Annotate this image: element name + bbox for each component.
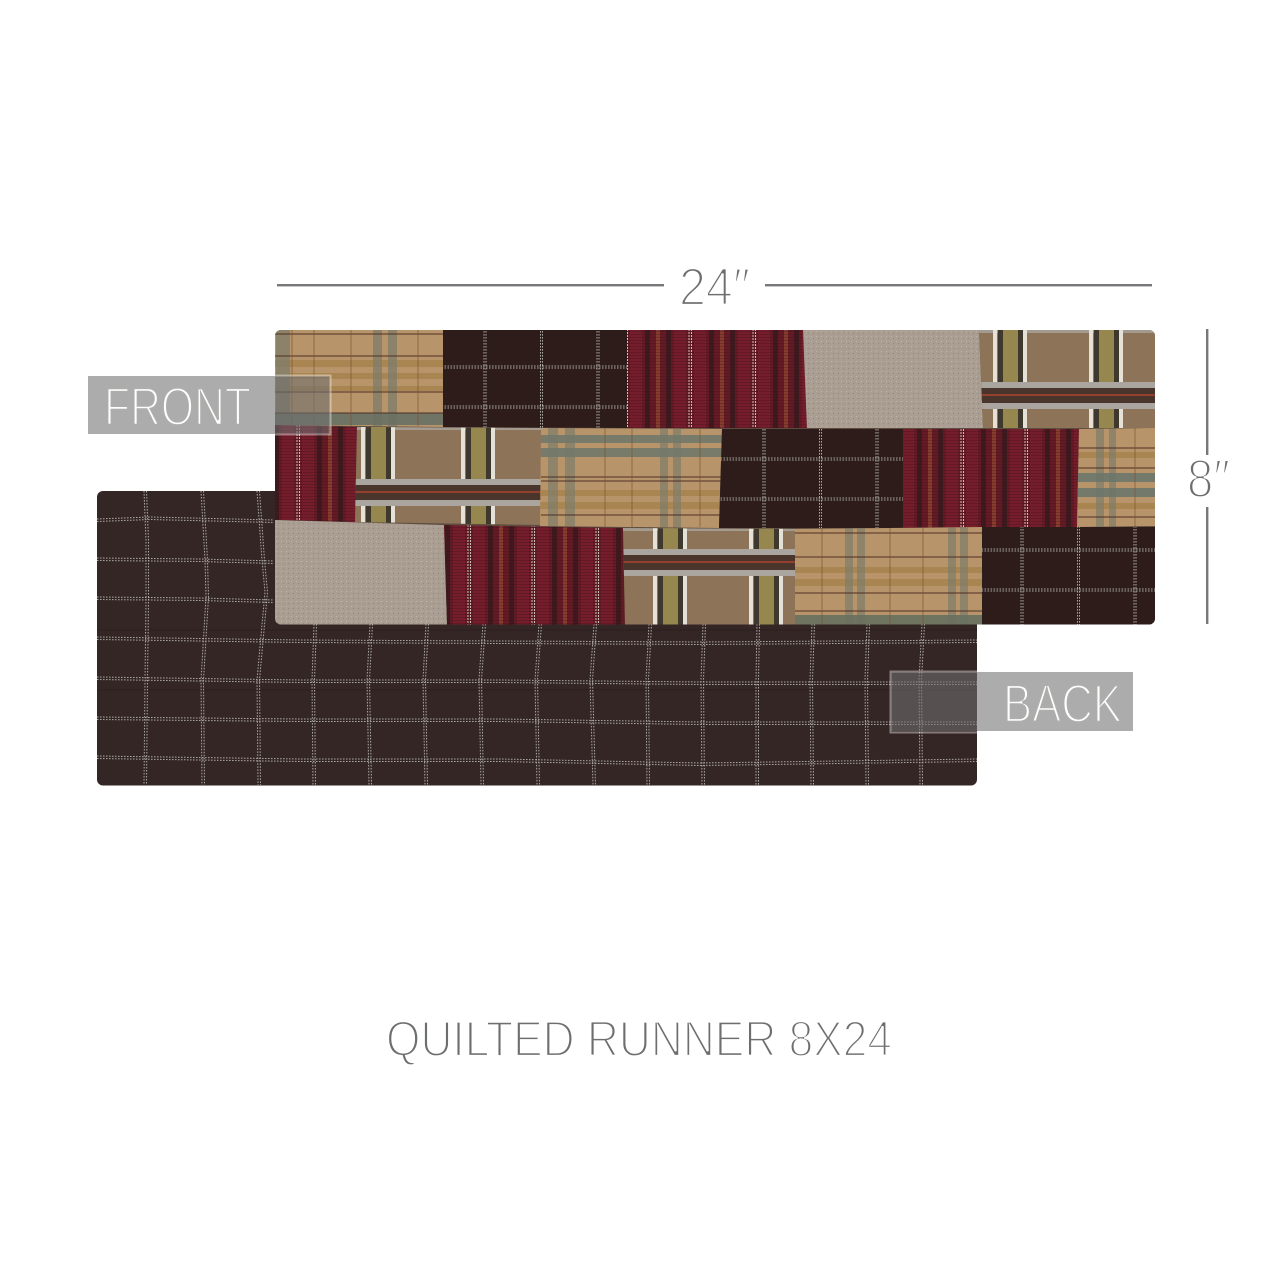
label: FRONT: FRONT bbox=[104, 377, 251, 437]
patch: tan plaid, row 2 bbox=[540, 428, 723, 528]
patch: tan plaid, row 1 bbox=[274, 329, 444, 428]
patch: red stripe, row 3 bbox=[444, 525, 625, 625]
label: BACK: BACK bbox=[1003, 674, 1122, 734]
patch: red stripe, row 1 bbox=[627, 329, 807, 428]
patch: tan plaid, row 3 bbox=[795, 527, 983, 625]
patch: grey felt, row 3 bbox=[274, 520, 447, 625]
patch: brown plaid, row 3 bbox=[623, 528, 795, 624]
label: BACK bbox=[890, 672, 1133, 734]
title: QUILTED RUNNER 8X24 bbox=[386, 1011, 892, 1067]
back of runner: dark windowpane fabric bbox=[97, 491, 977, 786]
patch: brown plaid, row 1 bbox=[979, 330, 1155, 428]
front of runner: patchwork bbox=[275, 330, 1155, 624]
patch: grey felt, row 1 bbox=[803, 329, 983, 428]
width dimension: 24 inches: 24″ bbox=[679, 258, 750, 317]
patch: tan plaid, row 2 right bbox=[1076, 428, 1156, 528]
patch: red stripe, row 2 left bbox=[274, 425, 357, 522]
patch: dark windowpane, row 2 bbox=[719, 429, 903, 528]
patch: brown plaid, row 2 bbox=[355, 427, 541, 525]
patch: dark windowpane, row 3 bbox=[982, 527, 1155, 625]
patch: dark windowpane, row 1 bbox=[443, 329, 629, 428]
infographic canvas bbox=[88, 269, 1228, 1064]
patch: red stripe, row 2 right bbox=[903, 429, 1079, 528]
height dimension: 8 inches: 8″ bbox=[1187, 449, 1230, 509]
